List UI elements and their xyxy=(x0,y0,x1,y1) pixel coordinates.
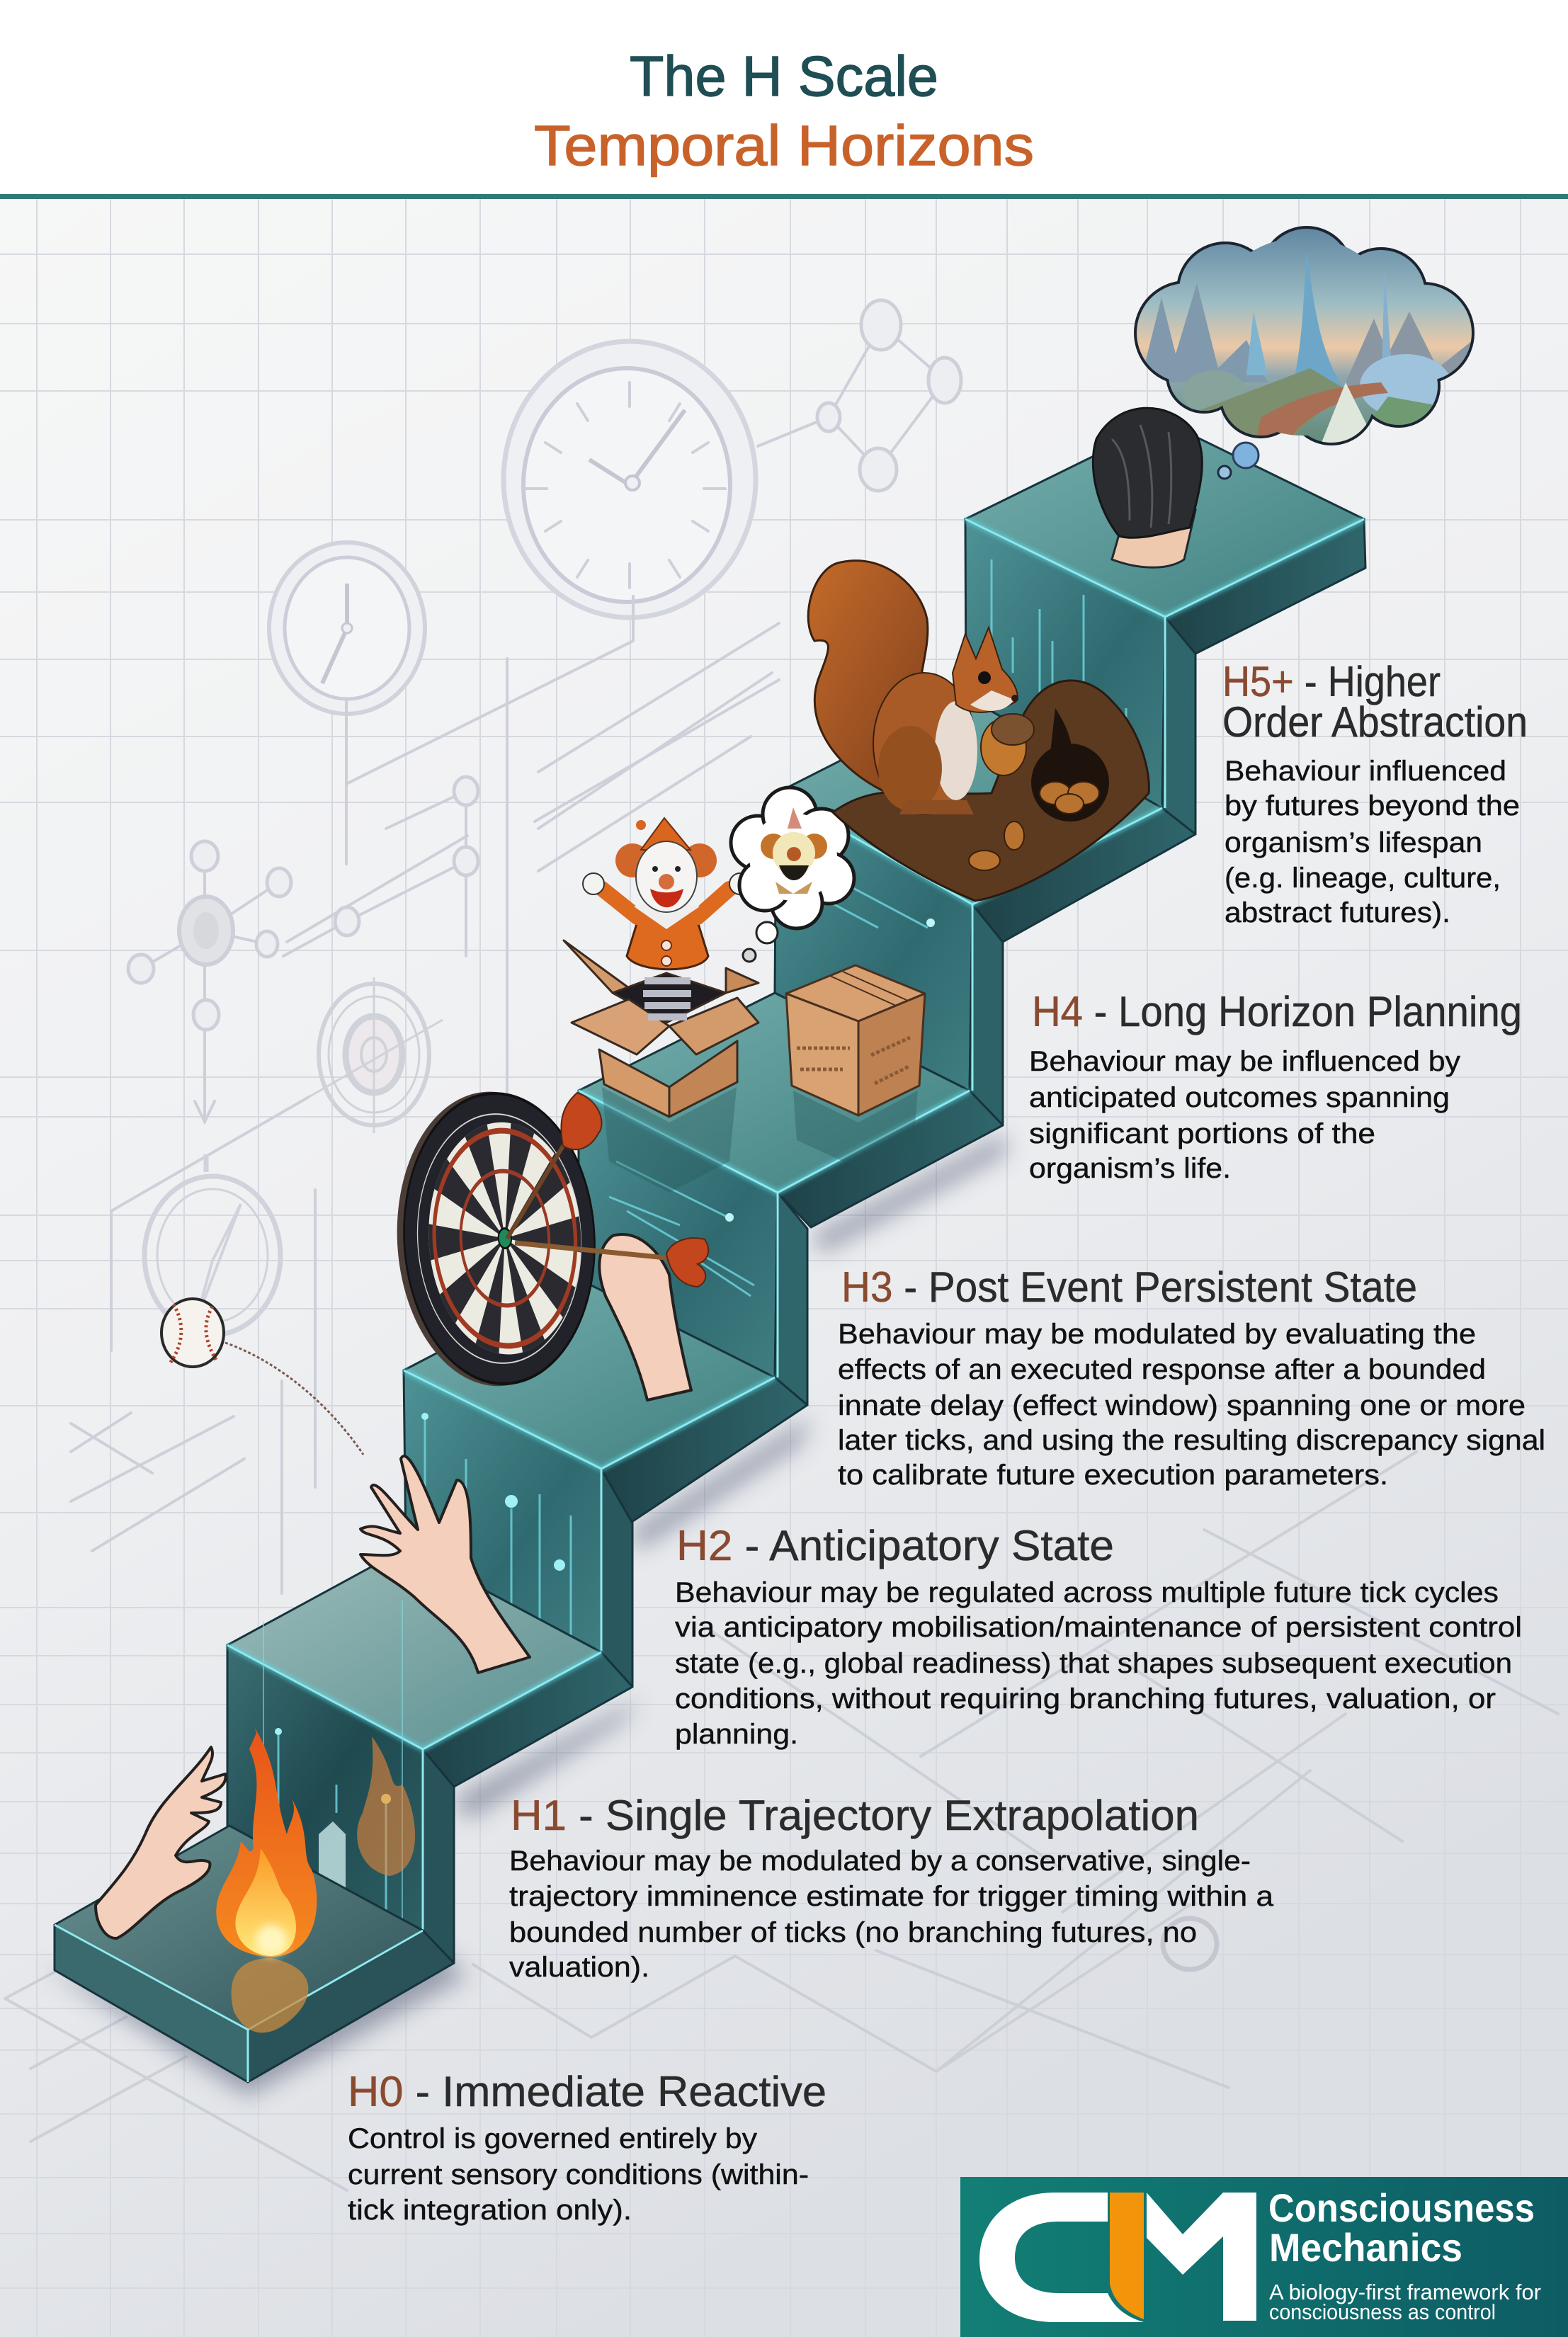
wall circuit H1 xyxy=(278,1732,386,1912)
open box xyxy=(564,940,759,1117)
text: H4 xyxy=(1029,988,1522,1184)
icon: baseball and trajectory xyxy=(161,1299,363,1455)
text: H2 xyxy=(675,1522,1522,1750)
thought bubble: clown xyxy=(731,787,854,962)
step H1 block xyxy=(227,1548,632,1976)
spring xyxy=(643,981,691,1017)
body H2: state (e.g., global readiness) that shapes subsequent execution xyxy=(675,1648,1512,1679)
sketch: circuit lines xyxy=(71,596,779,1593)
panel: Consciousness Mechanics logo: consciousness as control xyxy=(1269,2299,1496,2324)
icon: hand catching ball xyxy=(360,1456,530,1673)
body H5+ xyxy=(1225,756,1520,928)
step H3 block xyxy=(579,993,1003,1405)
body H4: anticipated outcomes spanning xyxy=(1029,1082,1450,1113)
body H5+: Behaviour influenced xyxy=(1225,756,1506,787)
body H2: Behaviour may be regulated across multiple future tick cycles xyxy=(675,1577,1499,1608)
icon: hand reaching to flame xyxy=(96,1747,226,1938)
step H4 block xyxy=(775,697,1195,1125)
sketch: network left xyxy=(128,777,478,1122)
step H0 block xyxy=(55,1826,454,2082)
body H4: Behaviour may be influenced by xyxy=(1029,1046,1460,1077)
acorn xyxy=(981,719,1026,775)
decorative ring lower right xyxy=(1163,1918,1217,1969)
body H3 xyxy=(838,1319,1545,1491)
icon: squirrel with burrow xyxy=(808,561,1149,901)
floor reflection of boxes xyxy=(602,1087,918,1193)
sketch: network top xyxy=(758,300,961,491)
sketch: target xyxy=(309,977,443,1133)
logo name: Consciousness xyxy=(1268,2185,1535,2230)
wall circuit H2 xyxy=(425,1416,571,1650)
wall circuit H3 xyxy=(609,1161,754,1296)
body H3: innate delay (effect window) spanning one or more xyxy=(838,1390,1526,1421)
body H2: planning. xyxy=(675,1719,798,1750)
title line 2: Temporal Horizons xyxy=(534,114,1034,177)
wall circuit H5 xyxy=(992,559,1126,744)
thought bubble: future city xyxy=(1133,227,1473,479)
head xyxy=(953,627,1018,712)
panel: Consciousness Mechanics logo xyxy=(960,2177,1568,2337)
icon: head seen from behind xyxy=(1093,408,1202,567)
body H1: trajectory imminence estimate for trigger timing within a xyxy=(509,1881,1274,1912)
logo mark M xyxy=(1147,2193,1256,2321)
body H5+: (e.g. lineage, culture, xyxy=(1225,863,1501,894)
body H2: via anticipatory mobilisation/maintenance of persistent control xyxy=(675,1612,1522,1643)
body H3: effects of an executed response after a bounded xyxy=(838,1354,1486,1385)
text: H5+ xyxy=(1222,658,1528,928)
heading H1: H1 - Single Trajectory Extrapolation xyxy=(511,1792,1199,1839)
wall crystal xyxy=(319,1821,346,1891)
body H2: conditions, without requiring branching futures, valuation, or xyxy=(675,1683,1496,1715)
heading H3: H3 - Post Event Persistent State xyxy=(841,1263,1417,1311)
body xyxy=(873,673,975,814)
body H1: valuation). xyxy=(509,1952,649,1983)
body H0 xyxy=(348,2123,809,2226)
logo mark I xyxy=(1110,2193,1144,2319)
body H0: Control is governed entirely by xyxy=(348,2123,757,2154)
icon: dart in board xyxy=(507,1093,602,1239)
body H2 xyxy=(675,1577,1522,1750)
body H3: later ticks, and using the resulting discrepancy signal xyxy=(838,1425,1545,1456)
clown body xyxy=(627,910,708,970)
sketch: compass xyxy=(144,1154,280,1335)
body H4: significant portions of the xyxy=(1029,1118,1375,1149)
icon: ghost flame on wall xyxy=(357,1736,415,1876)
tail xyxy=(808,561,935,797)
icon: flame xyxy=(216,1728,317,1957)
heading H5+: H5+ - Higher xyxy=(1222,658,1441,705)
staircase xyxy=(55,421,1365,2082)
panel: Consciousness Mechanics logo: Mechanics xyxy=(1269,2225,1462,2270)
body H5+: abstract futures). xyxy=(1225,897,1450,928)
sketch: large clock xyxy=(504,341,756,618)
icon: plain cardboard box xyxy=(786,965,925,1115)
body H1 xyxy=(509,1846,1274,1983)
wall circuit H4 xyxy=(814,868,928,928)
icon: dartboard xyxy=(390,1086,602,1391)
header rule xyxy=(0,194,1568,199)
shadow under stairs xyxy=(42,1133,1006,2096)
step H2 block xyxy=(404,1279,807,1687)
logo mark C xyxy=(979,2193,1144,2322)
heading H2: H2 - Anticipatory State xyxy=(676,1522,1114,1569)
heading H0: H0 - Immediate Reactive xyxy=(348,2068,826,2115)
text: H0 xyxy=(348,2068,826,2226)
heading H4: H4 - Long Horizon Planning xyxy=(1032,988,1522,1035)
text: H1 xyxy=(509,1792,1274,1983)
body H0: tick integration only). xyxy=(348,2195,632,2226)
logo tagline: A biology-first framework for xyxy=(1269,2280,1541,2304)
sketch: small clock xyxy=(269,542,425,714)
body H1: bounded number of ticks (no branching futures, no xyxy=(509,1917,1197,1948)
clown head xyxy=(615,843,649,877)
step H5 block xyxy=(965,421,1365,834)
header band xyxy=(0,0,1568,195)
body H5+: by futures beyond the xyxy=(1225,790,1520,821)
title xyxy=(534,45,1034,177)
heading H5+ line 2: Order Abstraction xyxy=(1222,698,1528,746)
icon: flame reflection xyxy=(232,1958,308,2032)
dirt mound xyxy=(833,681,1149,901)
body H5+: organism’s lifespan xyxy=(1225,827,1482,858)
text: H3 xyxy=(838,1263,1545,1491)
body H4: organism’s life. xyxy=(1029,1153,1231,1184)
body H0: current sensory conditions (within- xyxy=(348,2159,809,2190)
body H3: to calibrate future execution parameters. xyxy=(838,1460,1388,1491)
body H3: Behaviour may be modulated by evaluating the xyxy=(838,1319,1476,1350)
body H4 xyxy=(1029,1046,1460,1184)
title line 1: The H Scale xyxy=(630,45,938,108)
icon: jack-in-the-box clown xyxy=(564,818,759,1117)
body H1: Behaviour may be modulated by a conservative, single- xyxy=(509,1846,1251,1877)
icon: hand holding dart xyxy=(515,1234,708,1400)
